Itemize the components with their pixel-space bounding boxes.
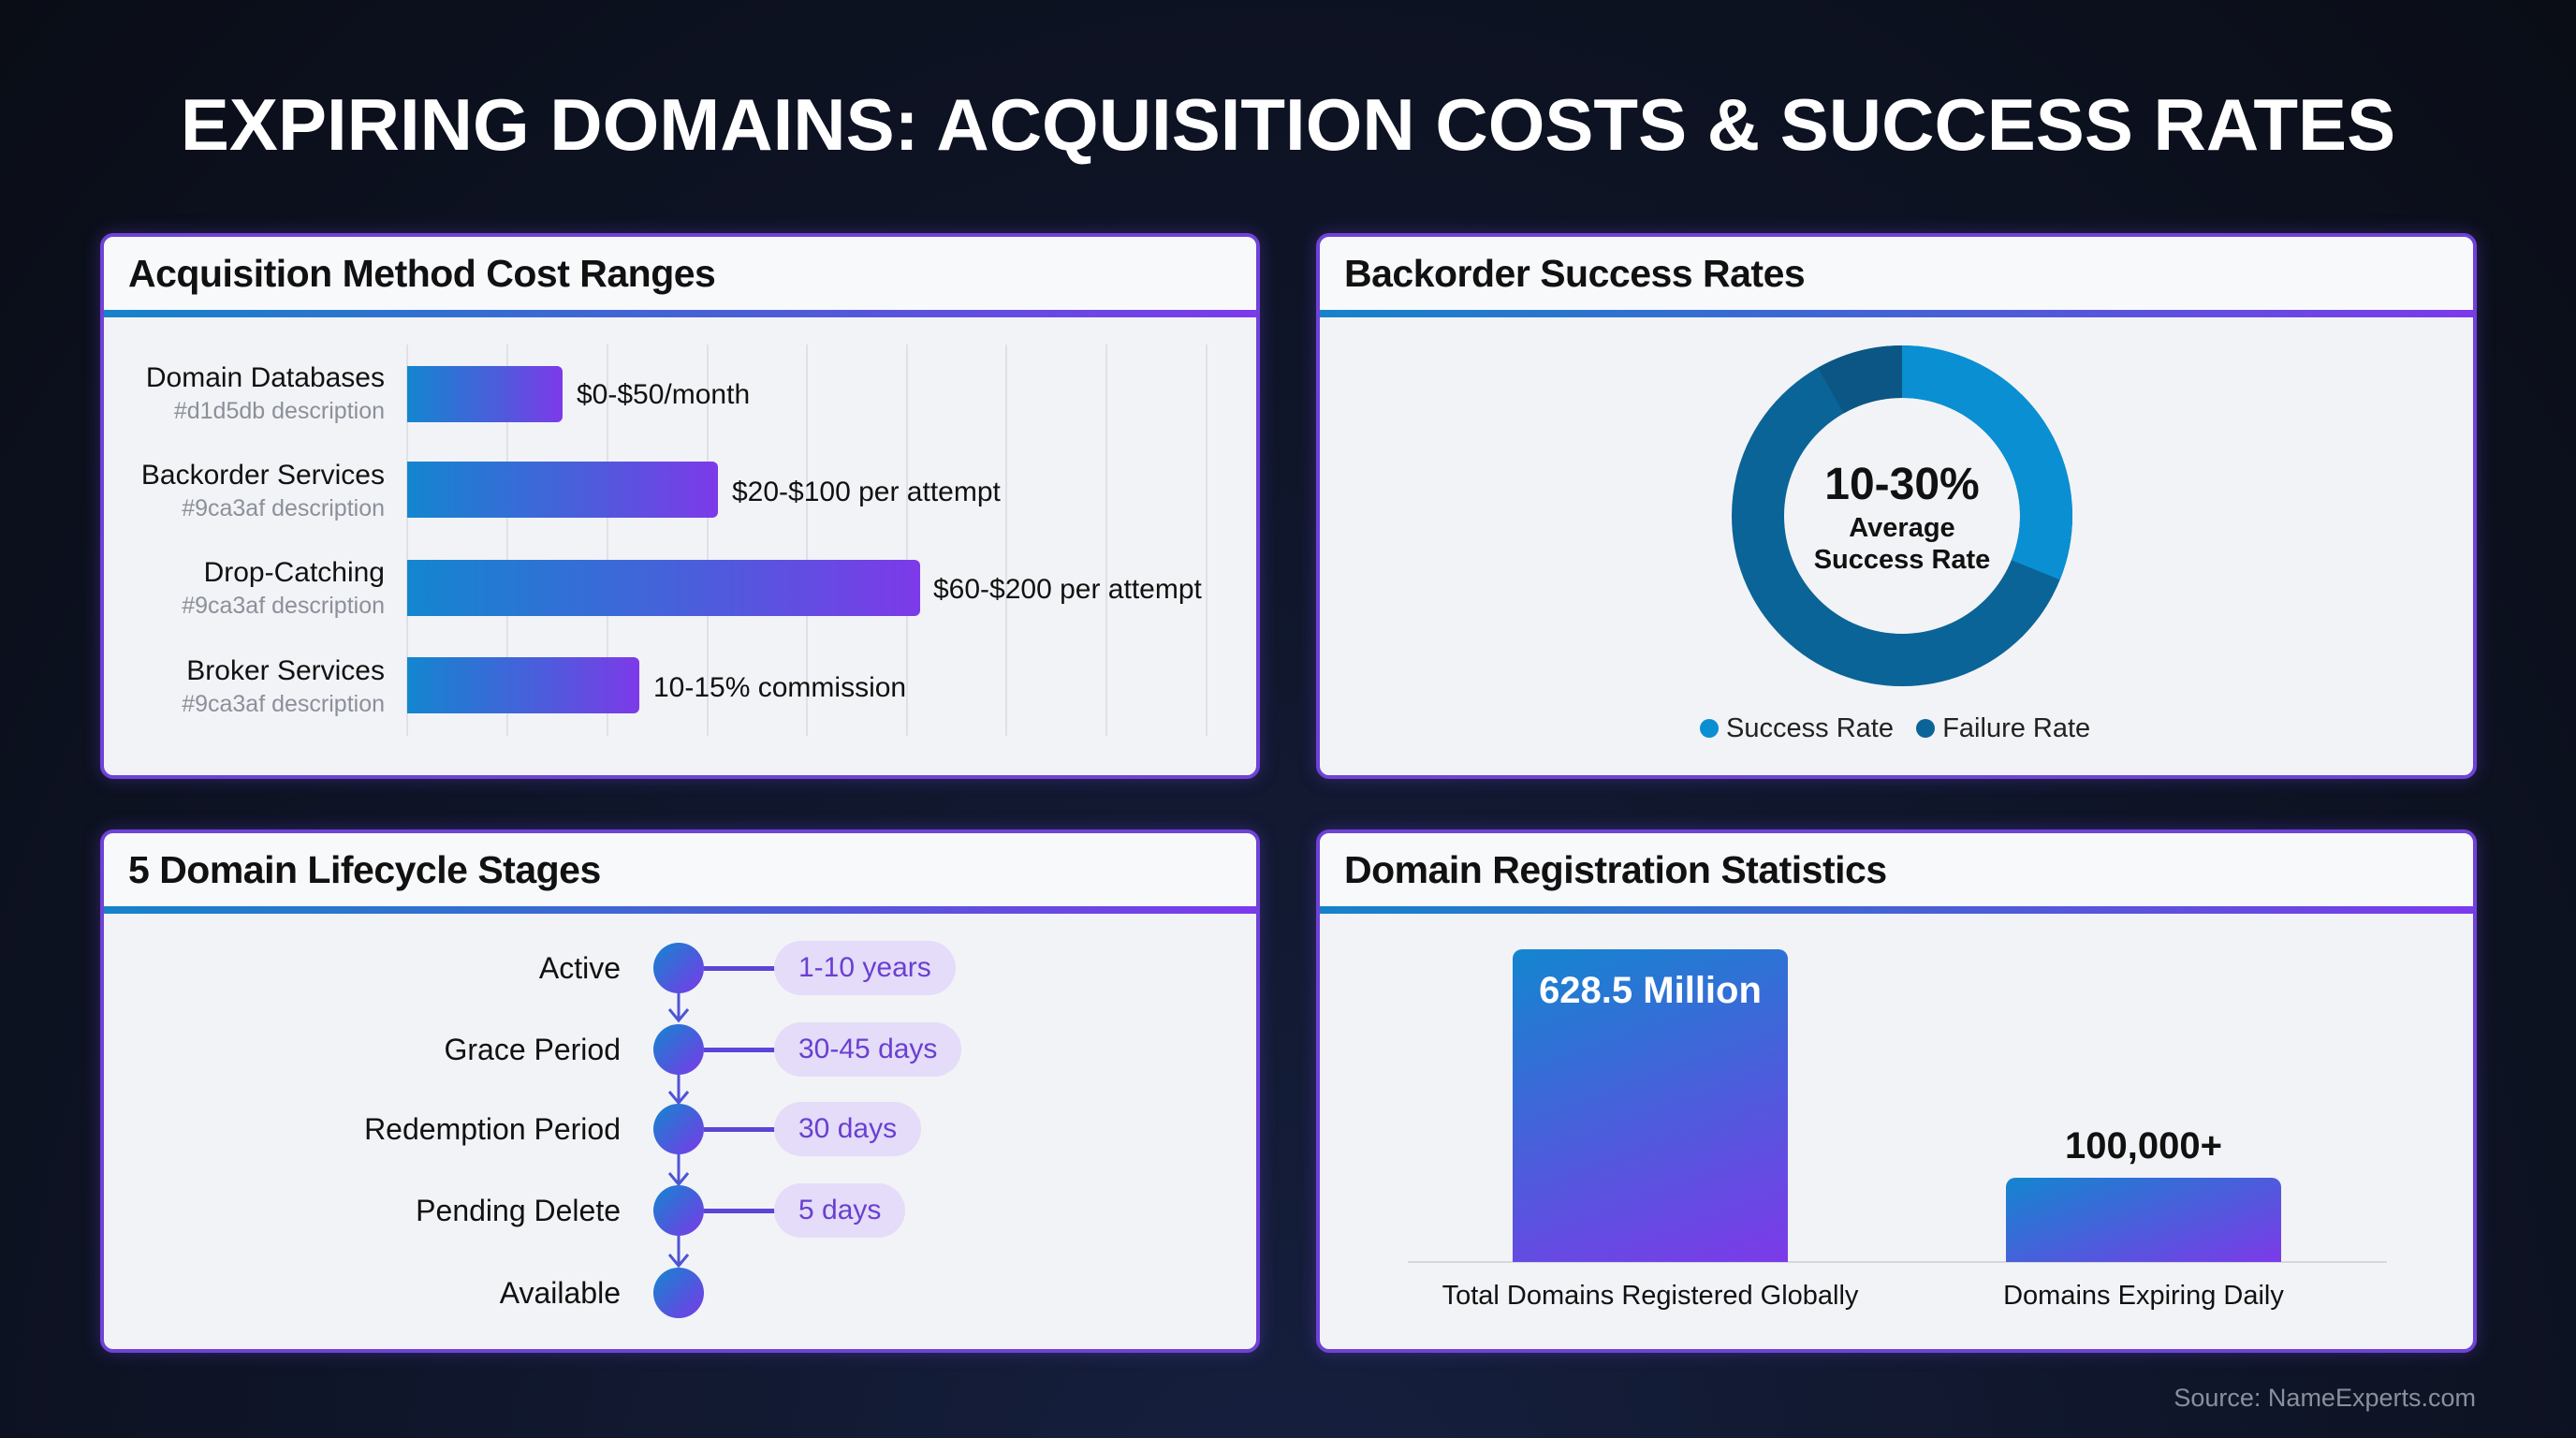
- donut chart: 10-30%: [1824, 460, 1980, 509]
- stage: redemption period: 30 days: [798, 1113, 897, 1144]
- bar: expiring daily: [2006, 1178, 2281, 1262]
- stage: active: [539, 941, 956, 995]
- bar chart: cost ranges: [141, 345, 1208, 736]
- legend: Success Rate Failure Rate: [1726, 713, 2090, 743]
- bar: total domains: [1513, 949, 1788, 1262]
- row: domain databases: $0-$50/month: [577, 379, 750, 410]
- stage: pending delete: Pending Delete: [416, 1194, 621, 1227]
- row: backorder services: [141, 460, 1001, 521]
- panel heading: [104, 833, 1256, 906]
- row: backorder services: #9ca3af description: [182, 495, 385, 521]
- stage: grace period: [444, 1022, 961, 1077]
- lifecycle flow: [364, 941, 961, 1318]
- panel heading: 5 Domain Lifecycle Stages: [128, 848, 601, 891]
- title: EXPIRING DOMAINS: ACQUISITION COSTS & SUCCESS RATES: [181, 83, 2395, 166]
- panel heading: Domain Registration Statistics: [1344, 848, 1887, 891]
- stage: grace period: 30-45 days: [798, 1034, 937, 1064]
- panel heading: [1320, 833, 2473, 906]
- row: drop-catching: [182, 557, 1202, 619]
- row: broker services: [182, 655, 906, 717]
- stage: pending delete: [416, 1183, 905, 1238]
- panel heading: [1320, 237, 2473, 310]
- stage: active: Active: [539, 951, 621, 985]
- source note: Source: NameExperts.com: [2174, 1384, 2476, 1412]
- panel: backorder success rates: [1316, 233, 2477, 779]
- stage: redemption period: Redemption Period: [364, 1112, 621, 1146]
- row: backorder services: $20-$100 per attempt: [732, 477, 1001, 507]
- panel: domain registration statistics: [1316, 829, 2477, 1353]
- stage: active: 1-10 years: [798, 952, 931, 983]
- stage: grace period: Grace Period: [444, 1033, 621, 1066]
- panel: acquisition method cost ranges: [100, 233, 1260, 779]
- axis labels: Total Domains Registered Globally: [1442, 1281, 1858, 1311]
- stage: pending delete: 5 days: [798, 1195, 881, 1225]
- row: broker services: Broker Services: [186, 655, 385, 686]
- row: drop-catching: #9ca3af description: [182, 593, 385, 619]
- value label: 100,000+: 100,000+: [2065, 1125, 2222, 1167]
- row: broker services: 10-15% commission: [653, 672, 906, 703]
- row: backorder services: Backorder Services: [141, 460, 385, 491]
- donut chart: Average: [1849, 513, 1955, 543]
- row: domain databases: Domain Databases: [146, 362, 385, 393]
- column chart: registration stats: [1408, 949, 2387, 1311]
- donut chart: [1732, 345, 2072, 686]
- row: domain databases: #d1d5db description: [174, 398, 385, 424]
- stage: available: [500, 1268, 704, 1318]
- donut chart: Success Rate: [1814, 545, 1990, 575]
- panel heading: Acquisition Method Cost Ranges: [128, 252, 715, 295]
- row: drop-catching: Drop-Catching: [204, 557, 385, 588]
- stage: available: Available: [500, 1276, 621, 1310]
- panel: lifecycle stages: [100, 829, 1260, 1353]
- row: drop-catching: $60-$200 per attempt: [933, 574, 1202, 605]
- row: domain databases: [146, 362, 750, 424]
- panel heading: [104, 237, 1256, 310]
- column chart: registration stats: Domains Expiring Daily: [2003, 1281, 2284, 1311]
- row: broker services: #9ca3af description: [182, 691, 385, 717]
- bar: total domains: 628.5 Million: [1539, 970, 1762, 1011]
- panel heading: Backorder Success Rates: [1344, 252, 1805, 295]
- stage: redemption period: [364, 1102, 921, 1156]
